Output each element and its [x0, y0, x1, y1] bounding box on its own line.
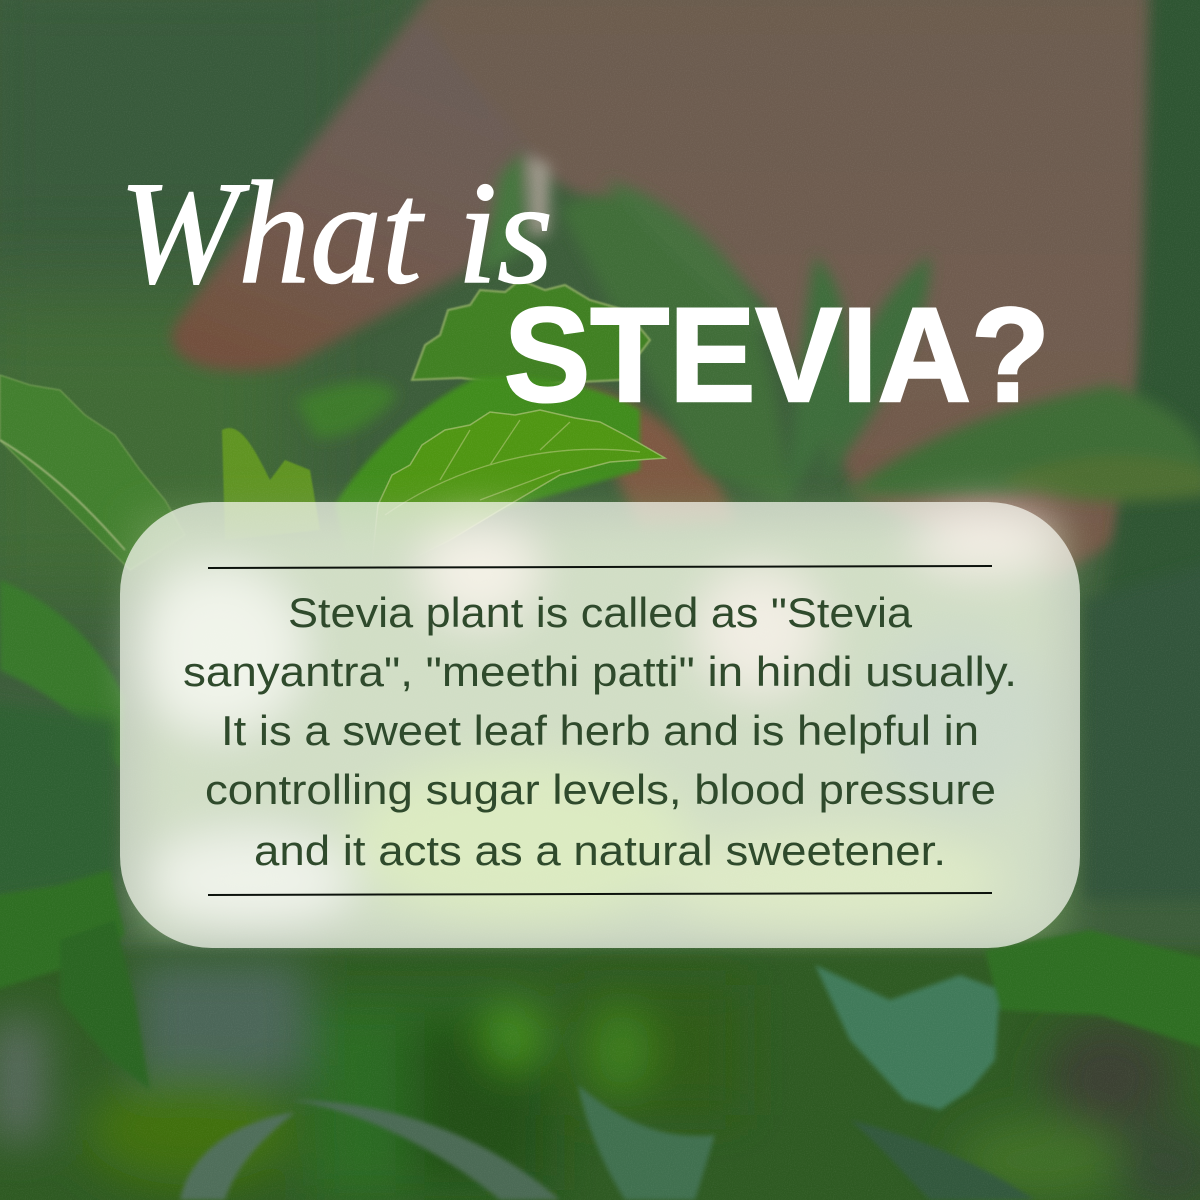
bright central leaf [335, 377, 640, 570]
bottom rule [208, 893, 992, 895]
serrated veined leaf [370, 410, 665, 580]
top rule [208, 566, 992, 568]
side greens [1085, 560, 1200, 900]
sharp serrated leaf behind STEVIA [412, 280, 650, 385]
description text: It is a sweet leaf herb and is helpful in [221, 707, 979, 754]
description text: sanyantra", "meethi patti" in hindi usually. [183, 648, 1017, 695]
description text: controlling sugar levels, blood pressure [205, 766, 996, 813]
title: What is: What is [119, 151, 553, 314]
foreground lower foliage [0, 950, 1200, 1200]
blurred mid leaves behind the title [295, 150, 1200, 505]
description text [183, 589, 1017, 874]
description text: and it acts as a natural sweetener. [254, 827, 946, 874]
hand with pointing finger [171, 0, 1190, 580]
description text: Stevia plant is called as "Stevia [288, 589, 913, 636]
left serrated leaves [0, 375, 185, 570]
title: STEVIA?: STEVIA? [504, 281, 1050, 430]
dark green right strip [1085, 0, 1200, 720]
panel: stevia description [120, 502, 1080, 948]
flowers and leaves beneath the panel [140, 510, 1060, 940]
